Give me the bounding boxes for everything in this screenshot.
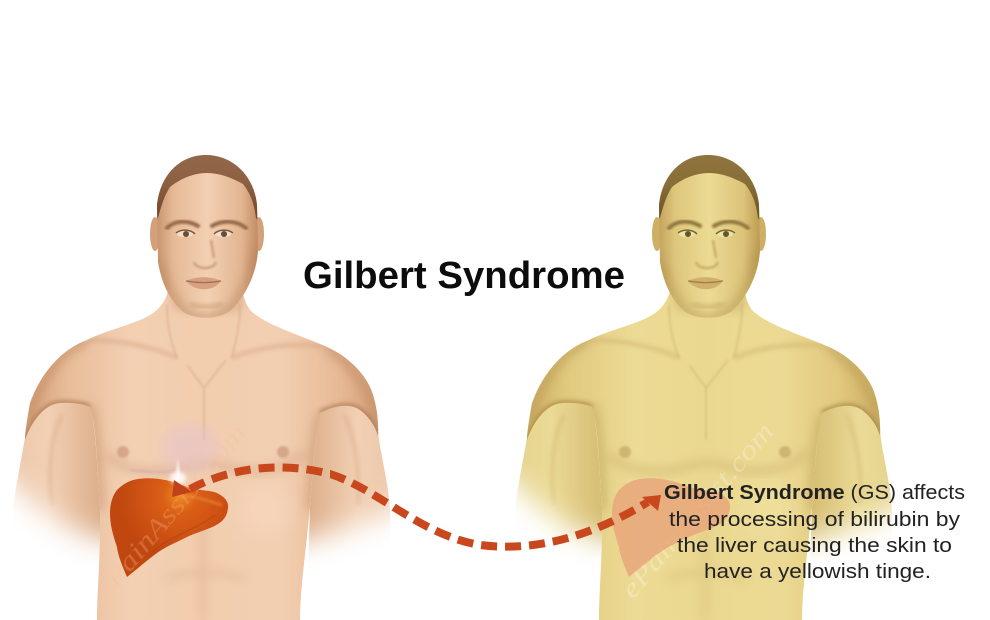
arrowhead: to description <box>642 495 661 511</box>
ears <box>150 217 264 251</box>
watermark: left: ePainAssist.com <box>89 418 252 604</box>
description text <box>664 481 965 583</box>
description text: the processing of bilirubin by <box>669 508 961 531</box>
head <box>157 155 258 318</box>
eyebrows <box>167 222 246 228</box>
jaw stubble shading <box>152 152 262 318</box>
torso with deltoids <box>25 280 378 620</box>
eyes <box>176 230 233 237</box>
nipples <box>117 446 289 458</box>
description text: have a yellowish tinge. <box>704 560 931 583</box>
chest glow above left liver <box>130 424 220 472</box>
title: Gilbert Syndrome <box>303 255 625 297</box>
watermark: right: ePainAssist.com <box>615 416 780 604</box>
dashed connector arrow <box>172 467 661 547</box>
right faded liver <box>612 478 730 577</box>
glow burst at liver arrow <box>170 458 186 486</box>
arrowhead: into left liver <box>172 480 192 497</box>
arm muscle folds <box>50 415 358 505</box>
description text: Gilbert Syndrome (GS) affects <box>664 481 965 504</box>
left arm <box>13 391 102 570</box>
description text: the liver causing the skin to <box>677 534 952 557</box>
right figure: yellowish skin tone <box>515 152 892 620</box>
mouth <box>186 277 221 289</box>
left figure: normal skin tone <box>13 152 390 620</box>
torso shading <box>25 290 378 620</box>
hair <box>152 152 262 225</box>
left liver: ePainAssist.com <box>89 418 252 604</box>
right arm <box>308 391 390 570</box>
nose <box>194 240 216 268</box>
arms fading to white <box>13 391 390 570</box>
